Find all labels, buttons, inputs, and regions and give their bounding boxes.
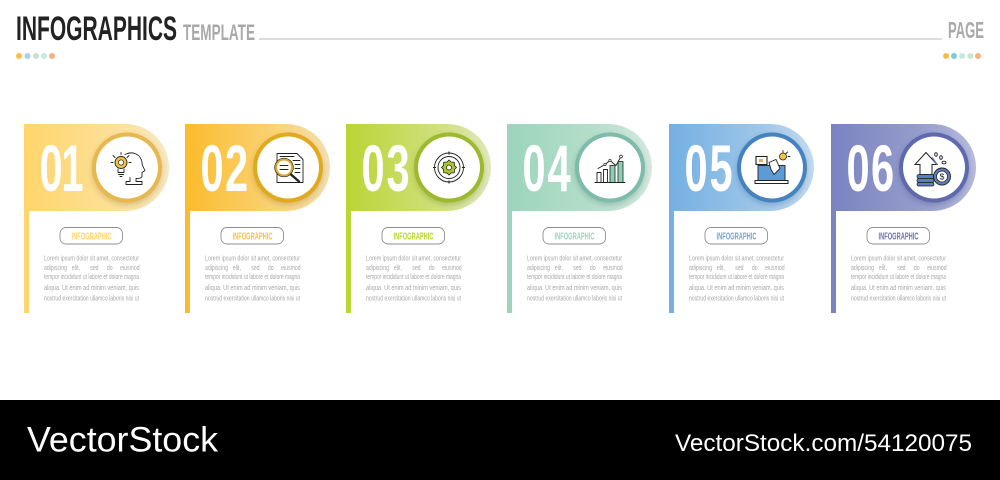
right dots xyxy=(943,53,981,59)
tag xyxy=(221,228,284,244)
number 04: 0 xyxy=(522,131,546,205)
panel: 06 xyxy=(831,124,976,313)
text block: Lorem ipsum dolor sit amet, consectetur xyxy=(44,254,139,262)
number 04: 4 xyxy=(548,131,571,205)
number 03 xyxy=(362,131,410,205)
text block: adipiscing xyxy=(527,264,550,272)
icon: coins with up arrow: $ xyxy=(940,172,945,182)
icon: document with magnifier xyxy=(275,154,303,182)
tag: INFOGRAPHIC xyxy=(72,232,112,242)
text block: sed xyxy=(90,264,99,272)
text block: do xyxy=(752,264,758,272)
text block: elit, xyxy=(394,264,402,272)
text block: aliqua. Ut enim ad minim veniam, quis xyxy=(527,283,622,292)
tag xyxy=(60,228,122,244)
text block: elit, xyxy=(233,264,241,272)
footer logo: VectorStock xyxy=(27,420,219,460)
text block: tempor incididunt ut labore et dolore magna xyxy=(527,272,623,281)
text block: sed xyxy=(735,264,744,272)
icon: coins with up arrow xyxy=(915,152,950,186)
number 01: 1 xyxy=(62,132,84,206)
text block: Lorem ipsum dolor sit amet, consectetur xyxy=(851,254,946,262)
text block: aliqua. Ut enim ad minim veniam, quis xyxy=(851,283,946,292)
text block: elit, xyxy=(879,264,887,272)
panel: 03 xyxy=(346,124,491,313)
text block xyxy=(851,254,947,302)
number 01: 0 xyxy=(40,131,63,205)
panel: 05 xyxy=(669,124,814,313)
number 01 xyxy=(40,131,84,206)
tag: INFOGRAPHIC xyxy=(716,232,756,242)
text block: nostrud exercitation ullamco laboris nisi ut xyxy=(851,294,947,302)
text block: nostrud exercitation ullamco laboris nisi ut xyxy=(205,294,301,302)
text block: do xyxy=(590,264,596,272)
text block: nostrud exercitation ullamco laboris nisi ut xyxy=(527,294,623,302)
text block: eiusmod xyxy=(603,264,623,272)
text block: adipiscing xyxy=(851,264,874,272)
text block: adipiscing xyxy=(366,264,389,272)
footer band xyxy=(0,400,1000,480)
text block xyxy=(205,254,301,302)
text block: do xyxy=(107,264,113,272)
text block: do xyxy=(268,264,274,272)
text block: sed xyxy=(573,264,582,272)
text block: elit, xyxy=(555,264,563,272)
number 06: 0 xyxy=(846,131,870,205)
text block xyxy=(366,254,462,302)
text block: Lorem ipsum dolor sit amet, consectetur xyxy=(689,254,784,262)
tag: INFOGRAPHIC xyxy=(394,232,434,242)
text block: Lorem ipsum dolor sit amet, consectetur xyxy=(366,254,461,262)
text block: aliqua. Ut enim ad minim veniam, quis xyxy=(44,283,139,292)
text block: eiusmod xyxy=(927,264,947,272)
text block: tempor incididunt ut labore et dolore magna xyxy=(44,272,140,281)
footer url: VectorStock.com/54120075 xyxy=(675,430,972,457)
text block: aliqua. Ut enim ad minim veniam, quis xyxy=(366,283,461,292)
icon: laptop with ideas xyxy=(755,150,790,184)
number 02: 2 xyxy=(225,131,248,205)
text block: elit, xyxy=(717,264,725,272)
text block: tempor incididunt ut labore et dolore magna xyxy=(689,272,785,281)
text block xyxy=(527,254,623,302)
tag xyxy=(867,228,930,244)
number 02 xyxy=(200,131,248,205)
left dots xyxy=(16,53,55,59)
text block: adipiscing xyxy=(205,264,228,272)
title: INFOGRAPHICS xyxy=(16,10,177,48)
text block: tempor incididunt ut labore et dolore magna xyxy=(851,272,947,281)
text block: eiusmod xyxy=(442,264,462,272)
number 05 xyxy=(684,131,733,205)
panel: 02 xyxy=(185,124,330,313)
number 03: 3 xyxy=(386,131,410,205)
tag: INFOGRAPHIC xyxy=(878,232,918,242)
icon: bar chart with trend line xyxy=(595,155,625,182)
text block xyxy=(44,254,140,302)
text block: tempor incididunt ut labore et dolore magna xyxy=(366,272,462,281)
text block: aliqua. Ut enim ad minim veniam, quis xyxy=(205,283,300,292)
number 03: 0 xyxy=(362,131,385,205)
text block: tempor incididunt ut labore et dolore magna xyxy=(205,272,301,281)
tag xyxy=(382,228,444,244)
text block: eiusmod xyxy=(281,264,301,272)
text block: do xyxy=(914,264,920,272)
text block: adipiscing xyxy=(44,264,67,272)
tag xyxy=(543,228,606,244)
number 06 xyxy=(846,131,894,205)
text block: adipiscing xyxy=(689,264,712,272)
tag: INFOGRAPHIC xyxy=(554,232,594,242)
text block xyxy=(689,254,785,302)
text block: Lorem ipsum dolor sit amet, consectetur xyxy=(205,254,300,262)
text block: aliqua. Ut enim ad minim veniam, quis xyxy=(689,283,784,292)
tag: INFOGRAPHIC xyxy=(232,232,272,242)
number 05: 5 xyxy=(710,131,733,205)
text block: Lorem ipsum dolor sit amet, consectetur xyxy=(527,254,622,262)
icon: head with lightbulb xyxy=(111,152,145,184)
subtitle: TEMPLATE xyxy=(183,20,255,45)
text block: sed xyxy=(897,264,906,272)
number 06: 6 xyxy=(871,131,894,205)
text block: sed xyxy=(251,264,260,272)
text block: nostrud exercitation ullamco laboris nisi ut xyxy=(366,294,462,302)
icon: target gear xyxy=(433,152,465,184)
text block: sed xyxy=(412,264,421,272)
text block: eiusmod xyxy=(765,264,785,272)
text block: elit, xyxy=(72,264,80,272)
panel: 04 xyxy=(507,124,652,313)
panel: 01 xyxy=(24,124,169,313)
number 05: 0 xyxy=(684,131,708,205)
text block: do xyxy=(429,264,435,272)
tag xyxy=(705,228,768,244)
text block: nostrud exercitation ullamco laboris nisi ut xyxy=(44,294,140,302)
text block: eiusmod xyxy=(120,264,140,272)
number 02: 0 xyxy=(200,131,224,205)
number 04 xyxy=(522,131,571,205)
text block: nostrud exercitation ullamco laboris nisi ut xyxy=(689,294,785,302)
